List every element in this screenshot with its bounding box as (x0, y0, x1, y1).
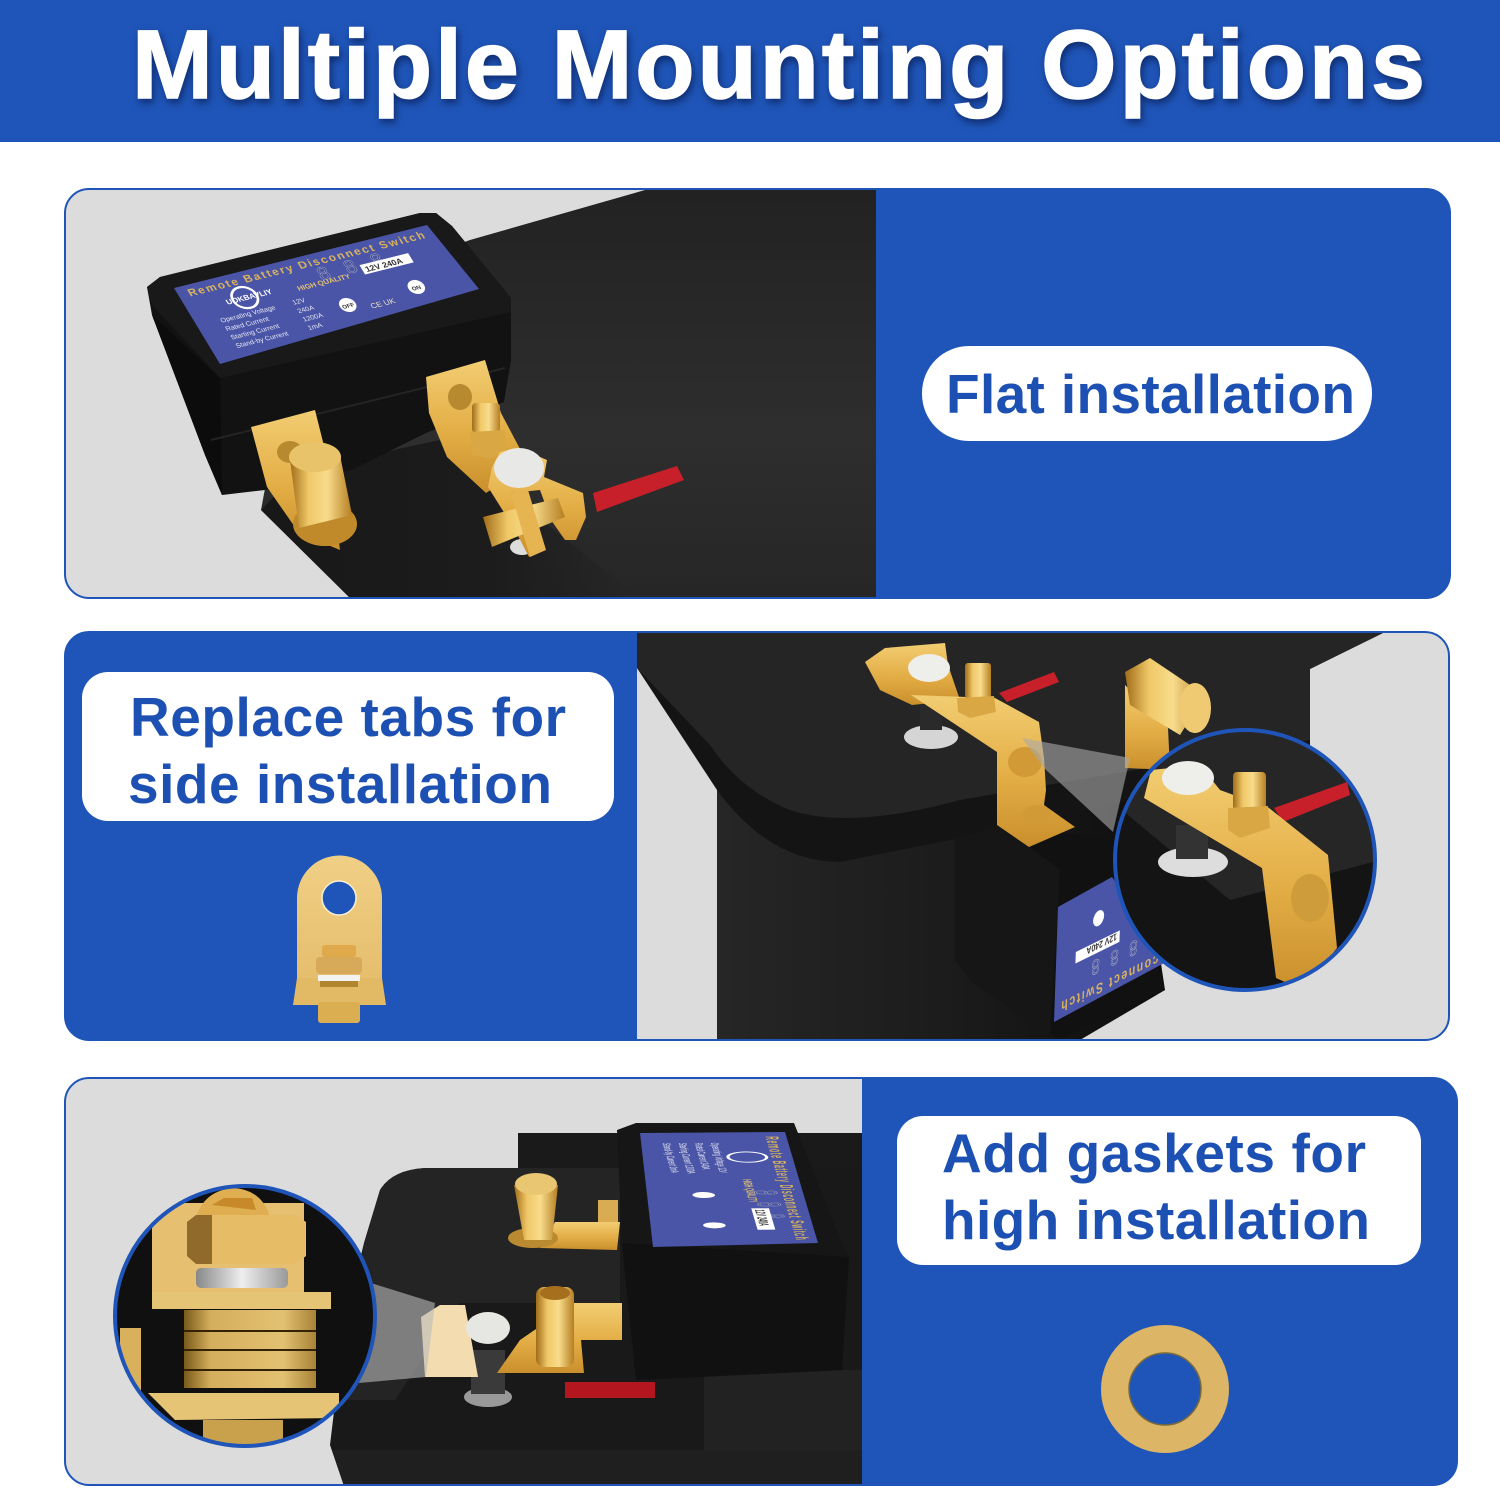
pill: side installation (82, 672, 614, 821)
device label: HIGH QUALITY (295, 272, 352, 293)
switch device top view (617, 1123, 849, 1380)
red bar (593, 466, 684, 512)
title: Multiple Mounting Options (132, 10, 1425, 119)
panel outline (65, 1078, 1457, 1485)
red bar (565, 1382, 655, 1398)
header banner (0, 0, 1500, 142)
device label: Stand-by Current 1mA (660, 1143, 681, 1173)
device label: Operating Voltage (219, 305, 277, 324)
device label: UOKBAVLIY (224, 287, 275, 306)
device label: 12V 240A (1086, 931, 1117, 957)
terminal with clamp and bent tab (865, 643, 1075, 847)
pill: flat installation: Flat installation (946, 363, 1355, 425)
device label: 12V 240A (751, 1210, 771, 1226)
device label: OFF (341, 303, 356, 311)
left terminal (251, 410, 357, 550)
plate and wall (637, 632, 1385, 1040)
panel outline (65, 189, 1450, 598)
pill: flat installation (922, 346, 1372, 441)
pill: side installation: side installation (128, 753, 552, 815)
device label (640, 1132, 818, 1247)
zoom cone (359, 1283, 435, 1383)
device label: 888 (746, 1190, 790, 1219)
pill: high installation: Add gaskets for (942, 1122, 1366, 1184)
icon: gasket washer (1115, 1339, 1215, 1439)
device label: Remote Battery Disconnect Switch (1061, 890, 1284, 1015)
icon: right-angle tab (293, 856, 386, 1023)
device label: Starting Current (230, 323, 281, 341)
lower terminal with clamp (421, 1286, 622, 1407)
upper terminal post (508, 1173, 620, 1250)
device label: Remote Battery Disconnect Switch (186, 230, 427, 299)
second terminal post (1125, 658, 1211, 770)
switch device rotated (1054, 877, 1165, 1022)
panel: flat installation (65, 189, 1450, 598)
panel: side installation (65, 632, 1449, 1040)
pill: high installation: high installation (942, 1189, 1370, 1251)
device label: CE UK (369, 297, 398, 310)
device label: 1200A (302, 312, 325, 323)
device label: Operating Voltage 12V (708, 1143, 729, 1173)
device label: Stand-by Current (235, 331, 290, 350)
device label: 888 (1091, 935, 1138, 981)
device label: 1mA (307, 322, 325, 332)
device label: HIGH QUALITY (740, 1179, 760, 1202)
stacked plates (330, 1133, 862, 1486)
device label: 240A (296, 305, 316, 315)
device label: 12V 240A (363, 256, 405, 274)
device label (1054, 877, 1164, 1022)
panel: high installation (65, 1078, 1457, 1486)
right terminal with clamp (426, 360, 586, 557)
red bar (999, 672, 1059, 702)
device label (174, 225, 479, 364)
pill: high installation (897, 1116, 1421, 1265)
zoom circle detail (115, 1186, 375, 1450)
panel outline (65, 632, 1449, 1040)
pill: side installation: Replace tabs for (130, 686, 566, 748)
mounting plate (261, 190, 876, 598)
device label: ON (411, 285, 423, 292)
device label: Remote Battery Disconnect Switch (761, 1136, 812, 1240)
device label: Rated Current (224, 316, 271, 333)
zoom circle detail (1110, 720, 1380, 990)
device label: 12V (291, 297, 307, 306)
switch device (147, 213, 511, 495)
zoom cone (1022, 738, 1130, 832)
device label: 888 (313, 250, 388, 285)
device label: Starting Current 1200A (676, 1143, 697, 1174)
device label: Rated Current 240A (692, 1143, 712, 1170)
